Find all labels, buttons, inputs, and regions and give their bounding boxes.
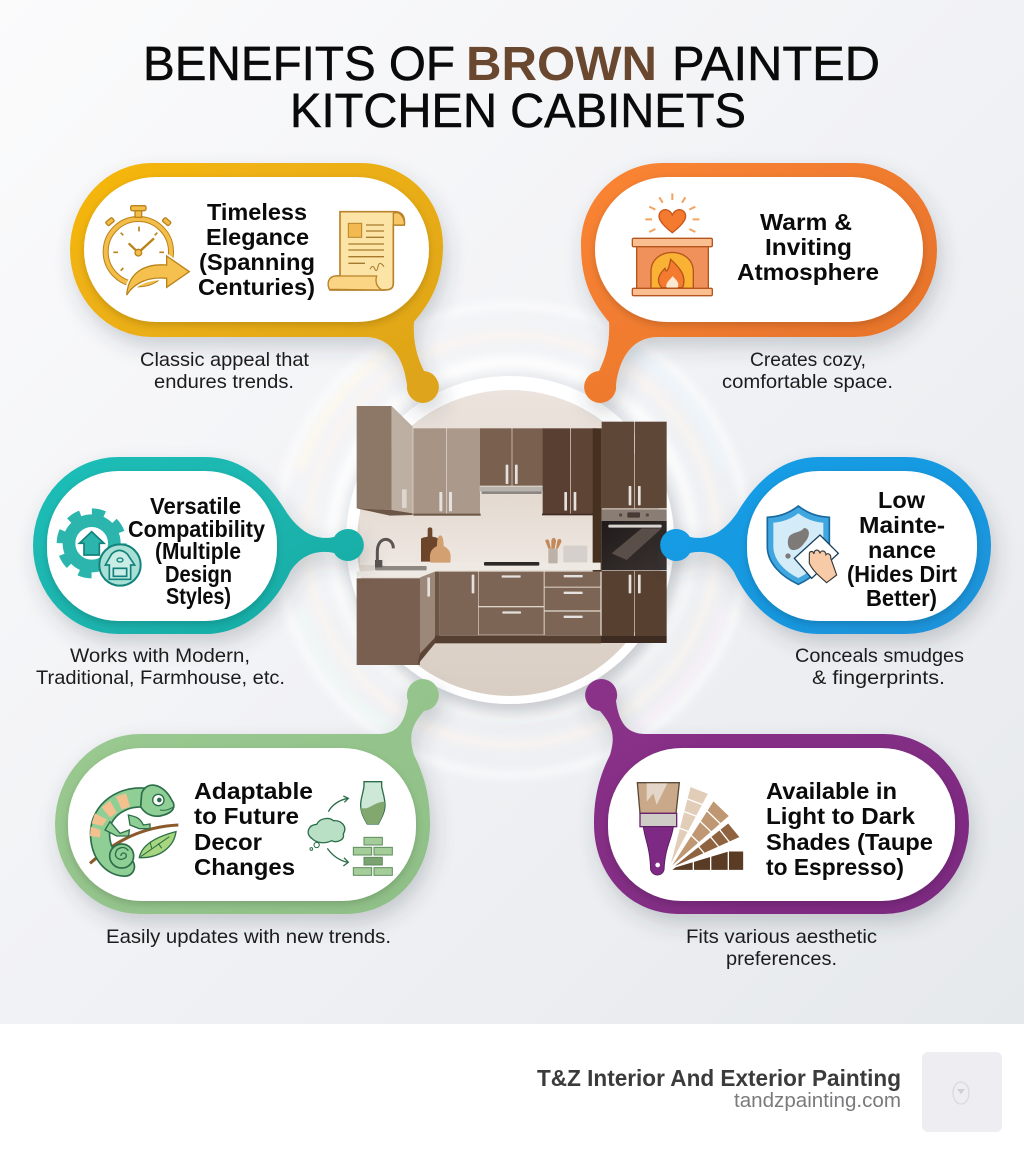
icon: paint brush (637, 783, 679, 875)
caption: timeless elegance: Classic appeal that (140, 349, 310, 371)
panel heading: Versatile (150, 493, 241, 519)
panel heading: to Future (194, 803, 299, 829)
panel heading: (Hides Dirt (847, 561, 957, 587)
title: PAINTED (672, 38, 880, 91)
panel heading: Decor (194, 829, 262, 855)
panel heading: Compatibility (128, 516, 265, 542)
panel: timeless elegance (70, 163, 443, 403)
title: KITCHEN CABINETS (290, 85, 746, 138)
panel: light to dark shades (585, 679, 969, 914)
caption: light to dark shades (686, 926, 877, 970)
caption: warm and inviting: Creates cozy, (750, 349, 866, 371)
panel heading: Elegance (206, 224, 309, 250)
panel: low maintenance (660, 457, 991, 634)
panel heading: Warm & (760, 209, 852, 235)
caption: low maintenance: Conceals smudges (795, 645, 964, 667)
panel heading (128, 493, 265, 609)
panel heading: Available in (766, 778, 897, 804)
panel heading: to Espresso) (766, 854, 904, 880)
caption: light to dark shades: Fits various aesthetic (686, 926, 877, 948)
panel heading: Better) (866, 585, 937, 611)
caption: warm and inviting (722, 349, 893, 393)
decorative glow rings (277, 305, 747, 775)
icon: document scroll (328, 212, 404, 290)
brand name: T&Z Interior And Exterior Painting (537, 1065, 901, 1091)
panel heading: Atmosphere (737, 259, 879, 285)
panel heading (847, 487, 957, 611)
brand url: tandzpainting.com (734, 1090, 901, 1112)
caption: timeless elegance (140, 349, 310, 393)
panel heading: Design (165, 561, 232, 587)
panel heading: Centuries) (198, 274, 315, 300)
icon: shield being wiped (767, 506, 838, 584)
caption: warm and inviting: comfortable space. (722, 371, 893, 393)
panel heading: Timeless (207, 199, 307, 225)
panel heading: (Spanning (199, 249, 315, 275)
central kitchen illustration (346, 376, 674, 704)
panel heading (198, 199, 315, 300)
icon: fireplace with heart (632, 193, 712, 296)
icon: gear with house and barn (61, 513, 141, 586)
caption: adaptable to future decor: Easily updates with new trends. (106, 926, 391, 948)
title: BENEFITS OF (143, 38, 455, 91)
panel heading: Light to Dark (766, 803, 915, 829)
panel heading (766, 778, 933, 880)
panel heading (194, 778, 313, 880)
caption: low maintenance: & fingerprints. (812, 667, 945, 689)
icon: thought cloud with vase and bricks (308, 782, 392, 875)
panel heading: Changes (194, 854, 295, 880)
caption: versatile compatibility: Works with Modern, (70, 645, 250, 667)
icon: chameleon on branch (90, 785, 178, 868)
panel heading (737, 209, 879, 285)
title (143, 38, 880, 138)
panel heading: Inviting (765, 234, 852, 260)
icon: swatch fan (668, 786, 744, 871)
caption: versatile compatibility: Traditional, Farmhouse, etc. (36, 667, 285, 689)
panel heading: Low (878, 487, 925, 513)
caption: low maintenance (795, 645, 964, 689)
caption: timeless elegance: endures trends. (154, 371, 294, 393)
panel: versatile compatibility (33, 457, 364, 634)
icon: stopwatch with arrow (105, 206, 189, 295)
caption: versatile compatibility (36, 645, 285, 689)
title: BROWN (466, 38, 657, 91)
caption: light to dark shades: preferences. (726, 948, 837, 970)
panel heading: nance (868, 537, 936, 563)
panel: adaptable to future decor (55, 679, 439, 914)
panel heading: Mainte- (859, 512, 945, 538)
panel heading: (Multiple (155, 538, 241, 564)
panel: warm and inviting (581, 163, 937, 403)
panel heading: Shades (Taupe (766, 829, 933, 855)
footer (0, 1024, 1024, 1154)
panel heading: Styles) (166, 583, 231, 609)
panel heading: Adaptable (194, 778, 313, 804)
logo placeholder (922, 1052, 1002, 1132)
